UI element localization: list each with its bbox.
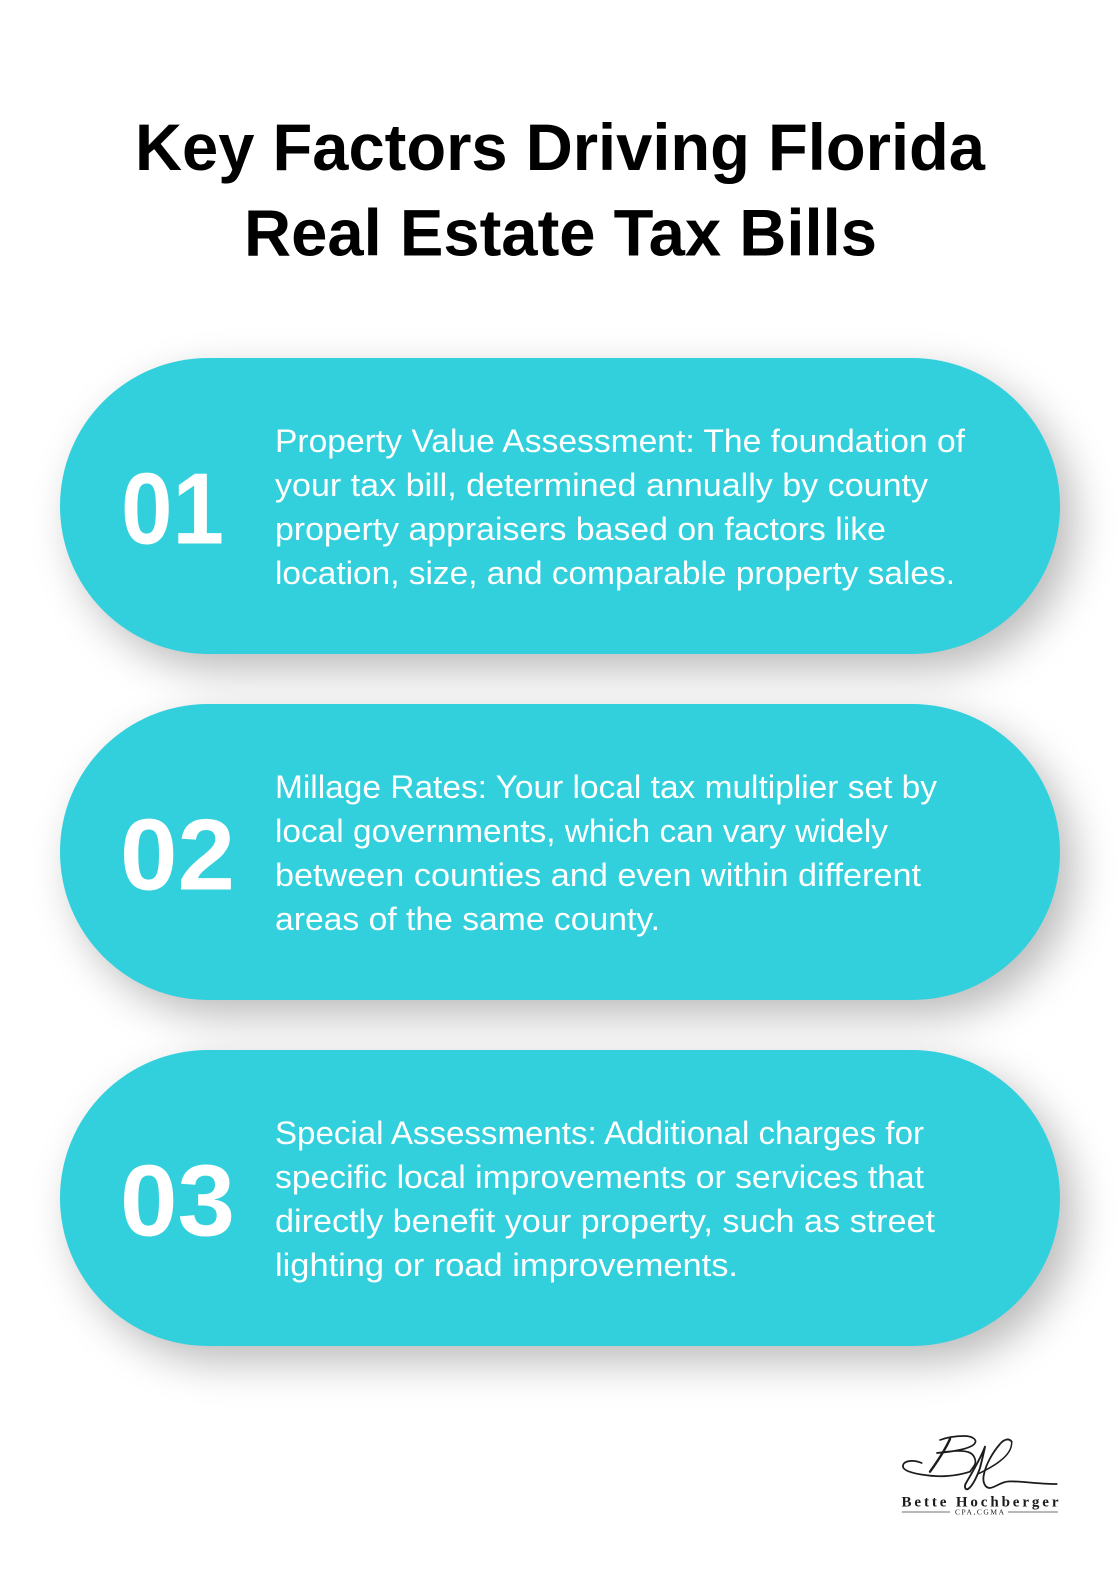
factor 1 description: property appraisers based on factors like bbox=[275, 511, 886, 547]
factor 3 description: lighting or road improvements. bbox=[275, 1247, 738, 1283]
factor 1 description: Property Value Assessment: The foundation of bbox=[275, 423, 966, 459]
factor 1 description bbox=[275, 423, 966, 591]
logo: Bette Hochberger bbox=[902, 1436, 1059, 1516]
panel: factor 3 background bbox=[60, 1050, 1060, 1346]
factor 2 description: between counties and even within different bbox=[275, 857, 921, 893]
title: Real Estate Tax Bills bbox=[244, 196, 877, 270]
factor 2 description: areas of the same county. bbox=[275, 901, 660, 937]
factor 2 description: Millage Rates: Your local tax multiplier set by bbox=[275, 769, 938, 805]
panel: factor 2 background bbox=[60, 704, 1060, 1000]
logo name: Bette Hochberger bbox=[902, 1494, 1059, 1510]
icon: signature flourish bbox=[903, 1436, 1057, 1489]
title bbox=[135, 110, 986, 270]
factor 3 description: directly benefit your property, such as street bbox=[275, 1203, 935, 1239]
factor 3 description: Special Assessments: Additional charges for bbox=[275, 1115, 924, 1151]
factor 3 description: specific local improvements or services that bbox=[275, 1159, 924, 1195]
factor 2 number: 02 bbox=[120, 800, 235, 912]
factor 3 number: 03 bbox=[120, 1146, 235, 1258]
factor 3 description bbox=[275, 1115, 935, 1283]
logo credentials: CPA,CGMA bbox=[955, 1508, 1005, 1516]
panel: factor 1 background bbox=[60, 358, 1060, 654]
factor 2 description bbox=[275, 769, 938, 937]
factor 1 description: your tax bill, determined annually by county bbox=[275, 467, 929, 503]
factor 2 description: local governments, which can vary widely bbox=[275, 813, 889, 849]
factor 1 description: location, size, and comparable property sales. bbox=[275, 555, 955, 591]
title: Key Factors Driving Florida bbox=[135, 110, 986, 184]
factor 1 number: 01 bbox=[121, 454, 224, 566]
